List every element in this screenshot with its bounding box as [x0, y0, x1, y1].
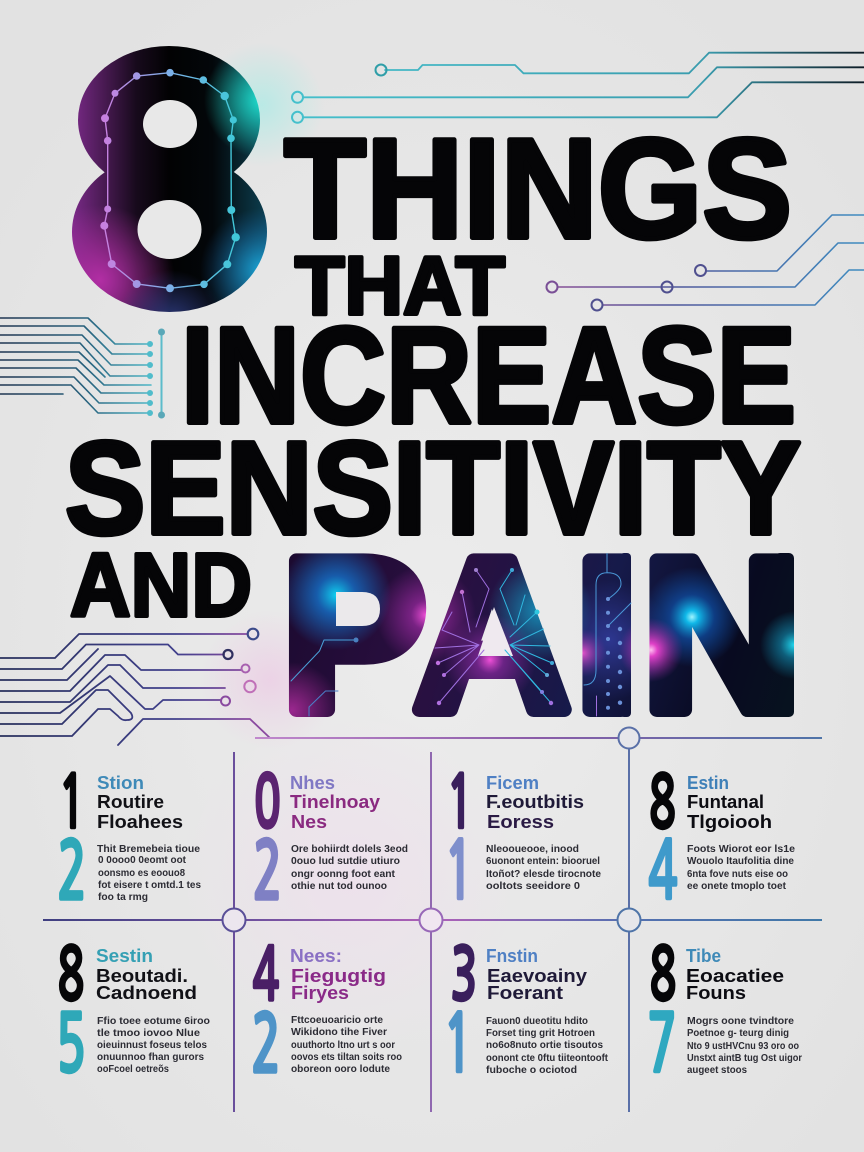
panel: row 1 column 4 [648, 768, 795, 911]
panel: row 1 column 3: Eoress [487, 811, 554, 832]
panel: row 2 column 1: Ffio toee eotume 6iroo [97, 1016, 210, 1027]
panel: row 1 column 1: foo ta rmg [98, 892, 148, 903]
panel: row 2 column 3: no6o8nuto ortie tisoutos [486, 1040, 603, 1051]
circuit trace on numeral 8 [100, 69, 240, 292]
panel: row 1 column 2: Nhes [290, 772, 335, 793]
panel: row 1 column 1: Thit Bremebeia tioue [97, 844, 200, 855]
panel: row 2 column 1: oieuinnust foseus telos [97, 1040, 207, 1051]
panel: row 2 column 2 [251, 940, 402, 1084]
panel: row 2 column 3: 1 [443, 1005, 473, 1084]
panel: row 2 column 1: tle tmoo iovoo Nlue [97, 1028, 200, 1039]
title [65, 110, 801, 636]
panel: row 1 column 3: 1 [444, 832, 474, 911]
grid lines and nodes [43, 728, 822, 1112]
panel: row 2 column 1: Sestin [96, 945, 153, 966]
panel: row 2 column 2: Fiegugtig [291, 965, 386, 986]
circuit traces in PAIN [291, 554, 631, 716]
panel: row 1 column 2: Ore bohiirdt dolels 3eod [291, 844, 408, 855]
panel: row 1 column 4: ee onete tmoplo toet [687, 881, 787, 892]
panel: row 1 column 2: ongr oonng foot eant [291, 869, 396, 880]
panel: row 2 column 4: 8 [649, 940, 677, 1012]
panel: row 1 column 2: Nes [291, 811, 327, 832]
panel: row 1 column 2: 2 [252, 832, 283, 911]
panel: row 2 column 4: Nto 9 ustHVCnu 93 oro oo [687, 1041, 799, 1052]
panel: row 2 column 4: Unstxt aintB tug Ost uigor [687, 1053, 802, 1064]
panel: row 2 column 3: Forset ting grit Hotroen [486, 1028, 595, 1039]
panel: row 1 column 1: fot eisere t omtd.1 tes [98, 880, 201, 891]
title: AND [70, 536, 252, 636]
panel: row 1 column 4: Funtanal [687, 791, 764, 812]
panel: row 2 column 1: Cadnoend [96, 982, 197, 1003]
panel: row 1 column 1: Floahees [97, 811, 183, 832]
panel: row 2 column 3: oonont cte 0ftu tiiteontooft [486, 1053, 609, 1064]
circuit lines: right middle [546, 215, 864, 310]
panel: row 2 column 3: Fauon0 dueotitu hdito [486, 1016, 588, 1027]
panel: row 2 column 4: Eoacatiee [686, 965, 784, 986]
panel: row 1 column 2: Tinelnoay [290, 791, 381, 812]
panel: row 1 column 4: Wouolo Itaufolitia dine [687, 856, 794, 867]
panel: row 2 column 1: Beoutadi. [96, 965, 188, 986]
panel: row 1 column 4: 4 [648, 832, 678, 911]
panel: row 1 column 1: 1 [58, 768, 86, 840]
panel: row 1 column 3: Itoñot? elesde tirocnote [486, 869, 601, 880]
panel: row 1 column 3: 1 [446, 768, 474, 840]
panel: row 2 column 4: Founs [686, 982, 746, 1003]
panel: row 2 column 3: fuboche o ociotod [486, 1065, 577, 1076]
panel: row 2 column 2: 4 [252, 940, 280, 1012]
panel: row 2 column 4: Mogrs oone tvindtore [687, 1016, 794, 1027]
panel: row 2 column 3: Foerant [487, 982, 563, 1003]
panel: row 1 column 4: Tlgoiooh [687, 811, 772, 832]
panel: row 2 column 2: oovos ets tiltan soits roo [291, 1052, 402, 1063]
panel: row 1 column 1: oonsmo es eoouo8 [98, 868, 185, 879]
circuit lines: left middle [0, 318, 165, 418]
panel: row 2 column 1: onuunnoo fhan gurors [97, 1052, 204, 1063]
panel: row 2 column 2: Firyes [291, 982, 349, 1003]
panel: row 2 column 1: 8 [57, 940, 85, 1012]
circuit lines: top right [292, 53, 864, 123]
panel: row 1 column 4: 8 [649, 768, 676, 840]
panel: row 1 column 4: Foots Wiorot eor ls1e [687, 844, 795, 855]
panel: row 1 column 1: 0 0ooo0 0eomt oot [98, 855, 187, 866]
big numeral 8: 8 [87, 15, 253, 351]
panel: row 1 column 2: othie nut tod ounoo [291, 881, 387, 892]
panel: row 2 column 4: Poetnoe g- teurg dinig [687, 1028, 789, 1039]
panel: row 2 column 3: Eaevoainy [487, 965, 588, 986]
panel: row 2 column 4: 7 [647, 1005, 677, 1084]
panel: row 2 column 1: ooFcoel oetreõs [97, 1064, 169, 1075]
panel: row 2 column 2: Fttcoeuoaricio orte [291, 1015, 383, 1026]
panel: row 1 column 3: F.eoutbitis [486, 791, 584, 812]
panel: row 2 column 1 [56, 940, 210, 1084]
panel: row 1 column 4: 6nta fove nuts eise oo [687, 869, 788, 880]
panel: row 1 column 2 [252, 768, 408, 911]
panel: row 1 column 3: Nleooueooe, inood [486, 844, 579, 855]
panel: row 1 column 1 [57, 768, 201, 911]
panel: row 2 column 4: Tibe [686, 945, 721, 966]
title: SENSITIVITY [65, 414, 801, 562]
panel: row 2 column 3: 3 [450, 940, 478, 1012]
panel: row 2 column 2: Nees: [290, 945, 342, 966]
title: THAT [295, 239, 505, 332]
panel: row 1 column 3: 6uonont entein: biooruel [486, 856, 600, 867]
title word PAIN with galaxy fill: PAIN [282, 514, 798, 756]
circuit lines: left lower [0, 629, 280, 745]
panel: row 2 column 2: 2 [251, 1005, 281, 1084]
panel: row 2 column 4: augeet stoos [687, 1065, 747, 1076]
panel: row 2 column 2: ouuthorto ltno urt s oor [291, 1040, 395, 1051]
panel: row 2 column 3: Fnstin [486, 945, 538, 966]
panel: row 1 column 1: Stion [97, 772, 144, 793]
panel: row 1 column 4: Estin [687, 772, 729, 793]
panel: row 1 column 2: 0ouo lud sutdie utiuro [291, 856, 400, 867]
panel: row 2 column 4 [647, 940, 802, 1084]
panel: row 2 column 2: oboreon ooro lodute [291, 1064, 390, 1075]
panel: row 1 column 3 [444, 768, 601, 911]
panel: row 1 column 3: Ficem [486, 772, 539, 793]
panel: row 1 column 1: 2 [57, 832, 87, 911]
panel: row 1 column 3: ooltots seeidore 0 [486, 881, 580, 892]
title: THINGS [284, 110, 792, 268]
panel: row 1 column 1: Routire [97, 791, 164, 812]
panel: row 2 column 1: 5 [56, 1005, 86, 1084]
panel: row 2 column 3 [443, 940, 609, 1084]
panel: row 1 column 2: 0 [254, 768, 281, 840]
panel: row 2 column 2: Wikidono tihe Fiver [291, 1027, 387, 1038]
